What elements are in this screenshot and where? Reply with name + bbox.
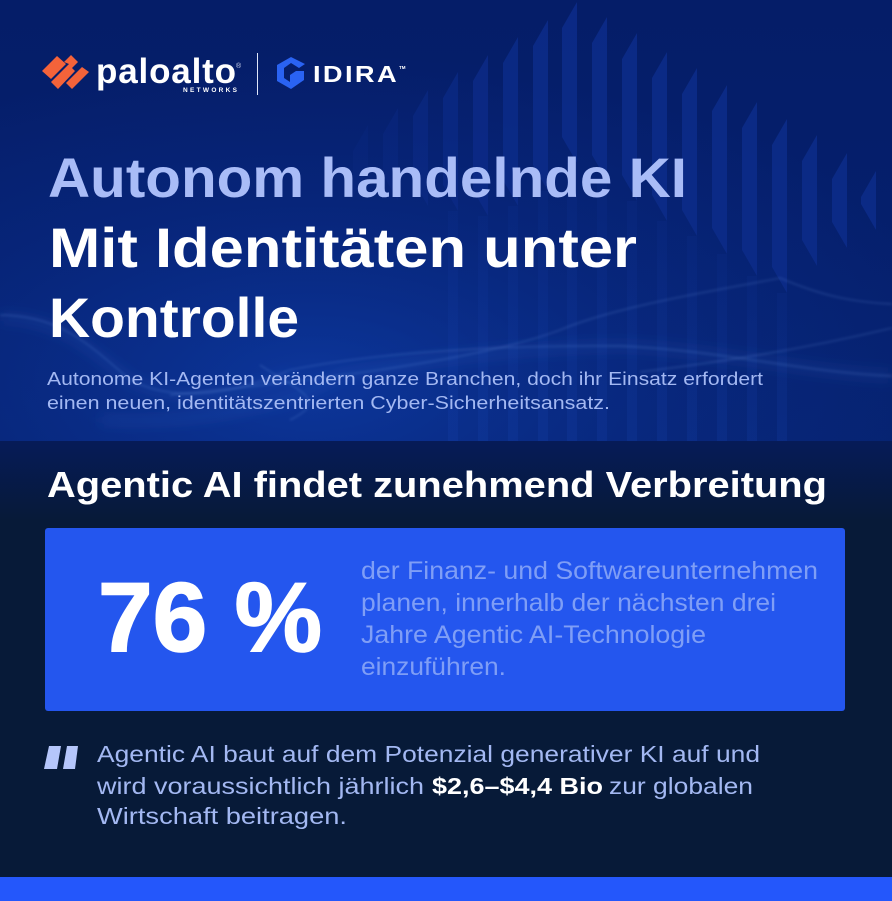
quote text: Wirtschaft beitragen. bbox=[97, 803, 347, 829]
decorative light waves bbox=[0, 278, 892, 421]
quote text: wird voraussichtlich jährlich bbox=[96, 773, 424, 799]
quote text: Agentic AI baut auf dem Potenzial generativer KI auf und bbox=[97, 741, 760, 767]
statistic description: einzuführen. bbox=[361, 653, 506, 681]
quote text bbox=[96, 741, 760, 829]
statistic description: der Finanz- und Softwareunternehmen bbox=[361, 557, 818, 585]
title line 3: Kontrolle bbox=[49, 286, 299, 349]
decorative waveform bars bbox=[353, 2, 876, 293]
wordmark: IDIRA: IDIRA bbox=[313, 61, 399, 87]
decorative bar tails bbox=[448, 163, 787, 441]
subtitle: einen neuen, identitätszentrierten Cyber-Sicherheitsansatz. bbox=[47, 392, 610, 413]
statistic description bbox=[361, 557, 818, 681]
panel: statistic bbox=[45, 528, 845, 711]
icon: Idira cube bbox=[277, 57, 305, 89]
subtitle: Autonome KI-Agenten verändern ganze Branchen, doch ihr Einsatz erfordert bbox=[47, 368, 763, 389]
statistic description: planen, innerhalb der nächsten drei bbox=[361, 589, 776, 617]
subtitle bbox=[47, 368, 763, 413]
logo: Palo Alto Networks bbox=[42, 52, 242, 94]
big number: 76 % bbox=[98, 562, 322, 672]
icon: Palo Alto bars bbox=[42, 55, 89, 89]
logo: Idira bbox=[277, 57, 406, 89]
wordmark: networks: NETWORKS bbox=[183, 87, 238, 94]
wordmark: paloalto: paloalto bbox=[96, 52, 236, 91]
section heading: Agentic AI findet zunehmend Verbreitung bbox=[47, 464, 827, 505]
quote text: $2,6–$4,4 Bio bbox=[432, 773, 603, 799]
statistic description: Jahre Agentic AI-Technologie bbox=[361, 621, 706, 649]
title line 1: Autonom handelnde KI bbox=[48, 146, 687, 209]
logo divider bbox=[257, 53, 258, 95]
registered mark: ® bbox=[236, 62, 242, 70]
icon: quotation mark bbox=[44, 746, 78, 769]
quote text: zur globalen bbox=[609, 773, 753, 799]
trademark: TM bbox=[399, 65, 406, 70]
title bbox=[48, 146, 687, 349]
hero background bbox=[0, 0, 892, 521]
title line 2: Mit Identitäten unter bbox=[49, 216, 637, 279]
bottom band bbox=[0, 877, 892, 901]
